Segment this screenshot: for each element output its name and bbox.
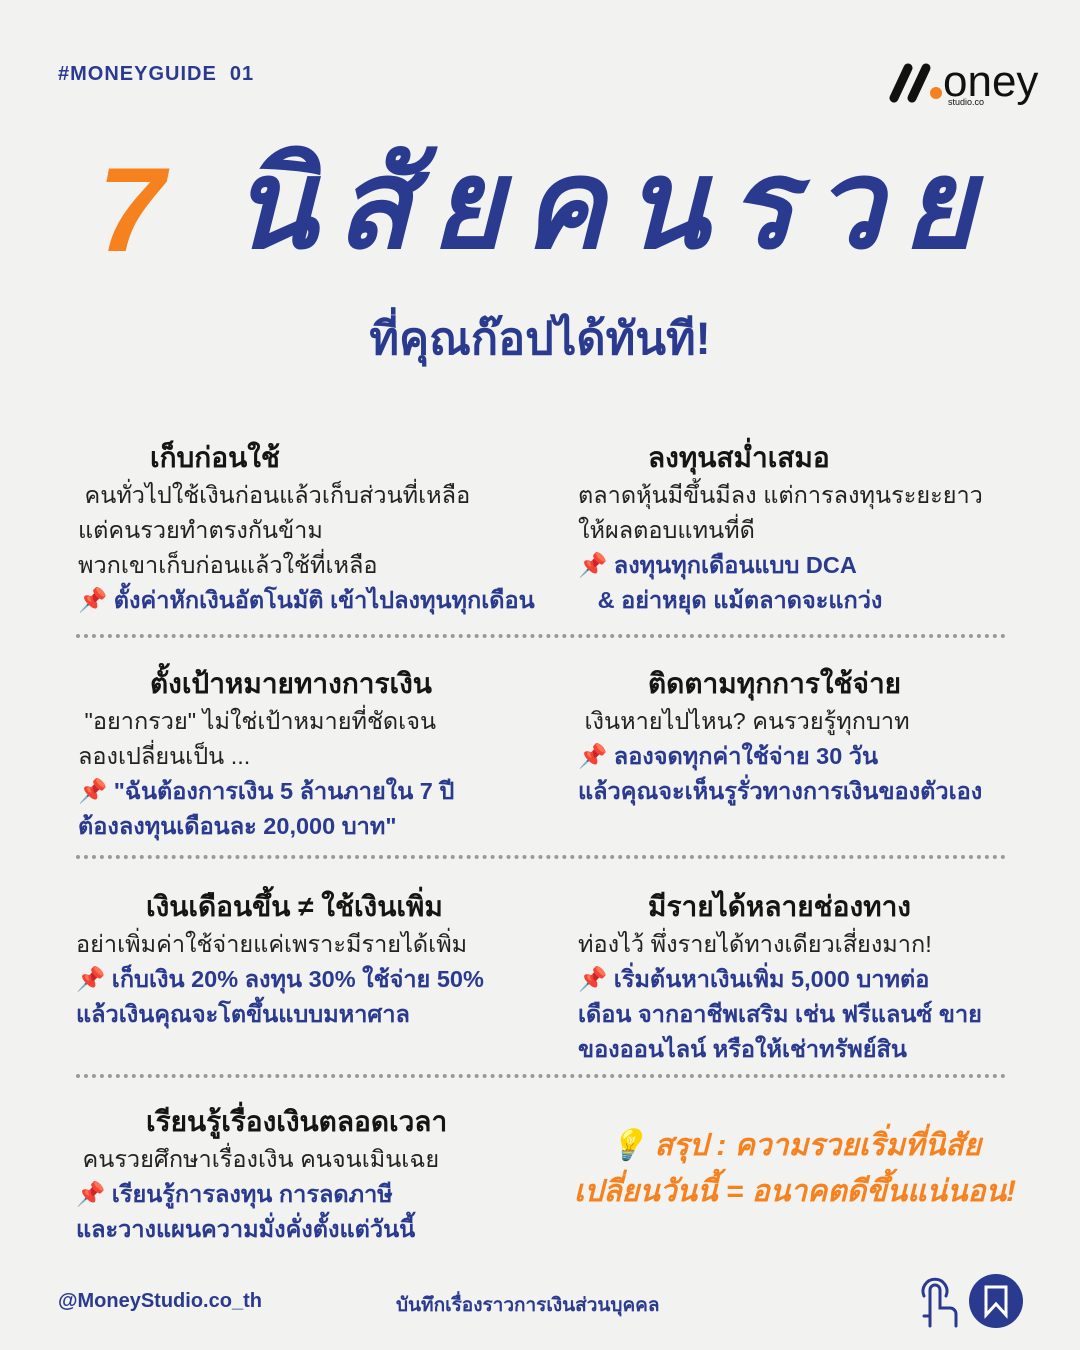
panel: invest consistently: ลงทุนสม่ำเสมอ [648, 442, 830, 473]
callout: summary: เปลี่ยนวันนี้ = อนาคตดีขึ้นแน่นอน! [574, 1175, 1016, 1208]
panel: keep learning [76, 1102, 447, 1242]
panel: track spending [578, 667, 982, 806]
panel: invest consistently: ตลาดหุ้นมีขึ้นมีลง แต่การลงทุนระยะยาว [578, 482, 983, 508]
panel: save first: คนทั่วไปใช้เงินก่อนแล้วเก็บส่วนที่เหลือ [85, 482, 470, 508]
panel: track spending: เงินหายไปไหน? คนรวยรู้ทุกบาท [585, 708, 910, 734]
tag: moneyguide: #MONEYGUIDE 01 [58, 63, 254, 85]
subtitle: ที่คุณก๊อปได้ทันที! [369, 313, 711, 364]
panel: track spending: 📌 ลองจดทุกค่าใช้จ่าย 30 วัน [578, 743, 878, 769]
panel: multiple incomes: 📌 เริ่มต้นหาเงินเพิ่ม 5,000 บาทต่อ [578, 966, 929, 992]
logo: studio.co [948, 97, 984, 107]
panel: financial goals: 📌 "ฉันต้องการเงิน 5 ล้านภายใน 7 ปี [78, 778, 454, 804]
panel: multiple incomes: ท่องไว้ พึ่งรายได้ทางเดียวเสี่ยงมาก! [578, 931, 932, 957]
panel: raise not spend: แล้วเงินคุณจะโตขึ้นแบบมหาศาล [76, 1001, 410, 1027]
panel: track spending: แล้วคุณจะเห็นรูรั่วทางการเงินของตัวเอง [578, 778, 982, 804]
icon: bookmark [969, 1274, 1023, 1328]
callout: summary [574, 1124, 1016, 1208]
panel: multiple incomes: มีรายได้หลายช่องทาง [648, 891, 911, 922]
panel: invest consistently: & อย่าหยุด แม้ตลาดจะแกว่ง [598, 587, 882, 613]
panel: multiple incomes: เดือน จากอาชีพเสริม เช่น ฟรีแลนซ์ ขาย [578, 1001, 982, 1027]
title: นิสัยคนรวย [232, 136, 994, 274]
footer handle: @MoneyStudio.co_th [58, 1290, 262, 1312]
title number: 7 [98, 143, 165, 277]
panel: keep learning: และวางแผนความมั่งคั่งตั้งแต่วันนี้ [76, 1216, 415, 1242]
panel: keep learning: เรียนรู้เรื่องเงินตลอดเวลา [146, 1106, 447, 1137]
logo [890, 57, 1038, 107]
panel: financial goals: ลองเปลี่ยนเป็น ... [78, 743, 250, 769]
panel: invest consistently: 📌 ลงทุนทุกเดือนแบบ DCA [578, 552, 857, 578]
panel: financial goals [78, 663, 454, 840]
panel: raise not spend: อย่าเพิ่มค่าใช้จ่ายแค่เพราะมีรายได้เพิ่ม [76, 931, 467, 957]
panel: invest consistently [578, 438, 983, 614]
panel: multiple incomes [578, 890, 982, 1062]
panel: raise not spend [76, 886, 484, 1028]
panel: save first: 📌 ตั้งค่าหักเงินอัตโนมัติ เข้าไปลงทุนทุกเดือน [78, 587, 535, 613]
panel: keep learning: คนรวยศึกษาเรื่องเงิน คนจนเมินเฉย [83, 1146, 439, 1172]
panel: track spending: ติดตามทุกการใช้จ่าย [648, 668, 901, 699]
panel: save first: เก็บก่อนใช้ [150, 442, 280, 473]
icon: tap hand [921, 1278, 958, 1328]
panel: financial goals: ต้องลงทุนเดือนละ 20,000 บาท" [78, 813, 396, 839]
panel: save first: แต่คนรวยทำตรงกันข้าม [78, 517, 323, 543]
callout: summary: 💡 สรุป : ความรวยเริ่มที่นิสัย [609, 1129, 981, 1162]
panel: invest consistently: ให้ผลตอบแทนที่ดี [578, 517, 755, 543]
logo: oney [943, 57, 1038, 106]
panel: raise not spend: เงินเดือนขึ้น ≠ ใช้เงินเพิ่ม [146, 891, 443, 922]
panel: keep learning: 📌 เรียนรู้การลงทุน การลดภาษี [76, 1181, 393, 1207]
panel: financial goals: ตั้งเป้าหมายทางการเงิน [150, 668, 432, 699]
panel: financial goals: "อยากรวย" ไม่ใช่เป้าหมายที่ชัดเจน [85, 708, 436, 734]
footer tagline: บันทึกเรื่องราวการเงินส่วนบุคคล [396, 1295, 660, 1316]
panel: multiple incomes: ของออนไลน์ หรือให้เช่าทรัพย์สิน [578, 1036, 907, 1062]
panel: raise not spend: 📌 เก็บเงิน 20% ลงทุน 30% ใช้จ่าย 50% [76, 966, 484, 992]
panel: save first: พวกเขาเก็บก่อนแล้วใช้ที่เหลือ [78, 552, 378, 578]
panel: save first [78, 440, 535, 614]
